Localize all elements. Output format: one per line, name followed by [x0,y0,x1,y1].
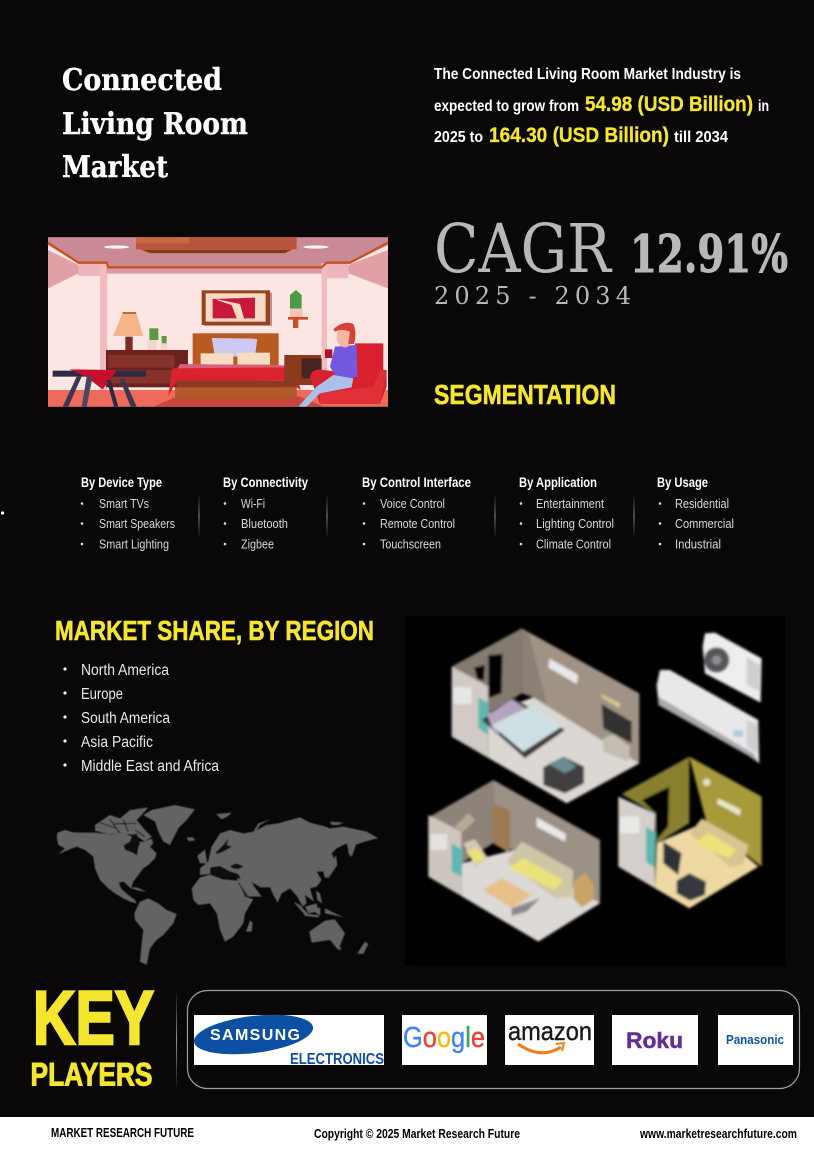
column: usage [657,475,734,552]
region list: North America [81,662,169,679]
heading: market share by region: MARKET SHARE, BY REGION [55,615,374,646]
room: living room [428,780,600,942]
title: Connected [62,63,222,98]
market size summary: 164.30 (USD Billion) [489,124,669,147]
logo: Panasonic: Panasonic [726,1033,784,1047]
title [62,63,248,185]
column: application: Entertainment [536,497,604,511]
footer: Copyright © 2025 Market Research Future [314,1127,520,1141]
column: device type: Smart TVs [99,497,149,511]
region list: Asia Pacific [81,734,153,751]
market size summary: The Connected Living Room Market Industry is [434,66,741,83]
logo: Panasonic [718,1015,793,1065]
column: control interface [362,475,471,552]
illustration: bedroom [48,237,388,407]
market size summary: 54.98 (USD Billion) [585,93,753,116]
market size summary [434,66,769,147]
heading: key players: PLAYERS [30,1056,152,1092]
heading: key players: KEY [33,976,154,1061]
footer [0,1117,814,1150]
world map [57,805,378,965]
column: control interface: By Control Interface [362,475,471,490]
column: usage: Commercial [675,517,734,531]
column: application: Climate Control [536,538,611,552]
market size summary: in [758,98,769,115]
column: device type: Smart Lighting [99,538,169,552]
logo: Google: Google [403,1022,485,1054]
region list: Europe [81,686,123,703]
logo: Roku [612,1015,698,1065]
market size summary: 2025 to [434,129,483,146]
logo: Amazon [505,1015,594,1065]
logo: Roku: Roku [626,1028,683,1053]
market size summary: expected to grow from [434,98,579,115]
footer: MARKET RESEARCH FUTURE [51,1126,194,1140]
column: control interface: Voice Control [380,497,445,511]
appliance: outdoor AC unit [703,633,762,703]
map: Eurasia, Africa and Oceania [192,813,378,954]
logo panel [188,990,800,1088]
appliance: indoor AC unit [657,670,759,763]
heading: segmentation: SEGMENTATION [434,379,616,410]
logo: Samsung Electronics: SAMSUNG [210,1027,300,1044]
map: Americas and Greenland [57,805,195,965]
column: connectivity: Zigbee [241,538,274,552]
column: usage: By Usage [657,475,708,490]
title: Living Room [62,107,248,142]
column: application [519,475,614,552]
region list: Middle East and Africa [81,758,219,775]
column: connectivity: By Connectivity [223,475,308,490]
column: device type: Smart Speakers [99,517,175,531]
CAGR figure: CAGR [434,210,613,288]
CAGR figure: 2025 - 2034 [434,282,631,310]
column: connectivity: Bluetooth [241,517,288,531]
stray bullet [1,511,4,515]
column: application: By Application [519,475,597,490]
room: bedroom [452,628,639,803]
logo: Amazon: amazon [508,1016,592,1046]
column: usage: Industrial [675,538,721,552]
title: Market [62,150,168,185]
market size summary: till 2034 [674,129,728,146]
illustration: isometric rooms [405,616,785,966]
CAGR figure [434,210,788,310]
column: control interface: Remote Control [380,517,455,531]
column: connectivity: Wi-Fi [241,497,265,511]
heading: key players [30,976,154,1092]
column: application: Lighting Control [536,517,614,531]
segmentation columns [81,475,734,552]
column: connectivity [223,475,308,552]
column: device type [81,475,175,552]
region list [63,662,219,775]
logo: Samsung Electronics: ELECTRONICS [290,1051,384,1068]
column: control interface: Touchscreen [380,538,441,552]
column: device type: By Device Type [81,475,162,490]
room: olive bedroom [618,757,762,908]
column: usage: Residential [675,497,729,511]
logo: Google [402,1015,487,1065]
region list: South America [81,710,170,727]
logo: Samsung Electronics [192,1009,384,1068]
